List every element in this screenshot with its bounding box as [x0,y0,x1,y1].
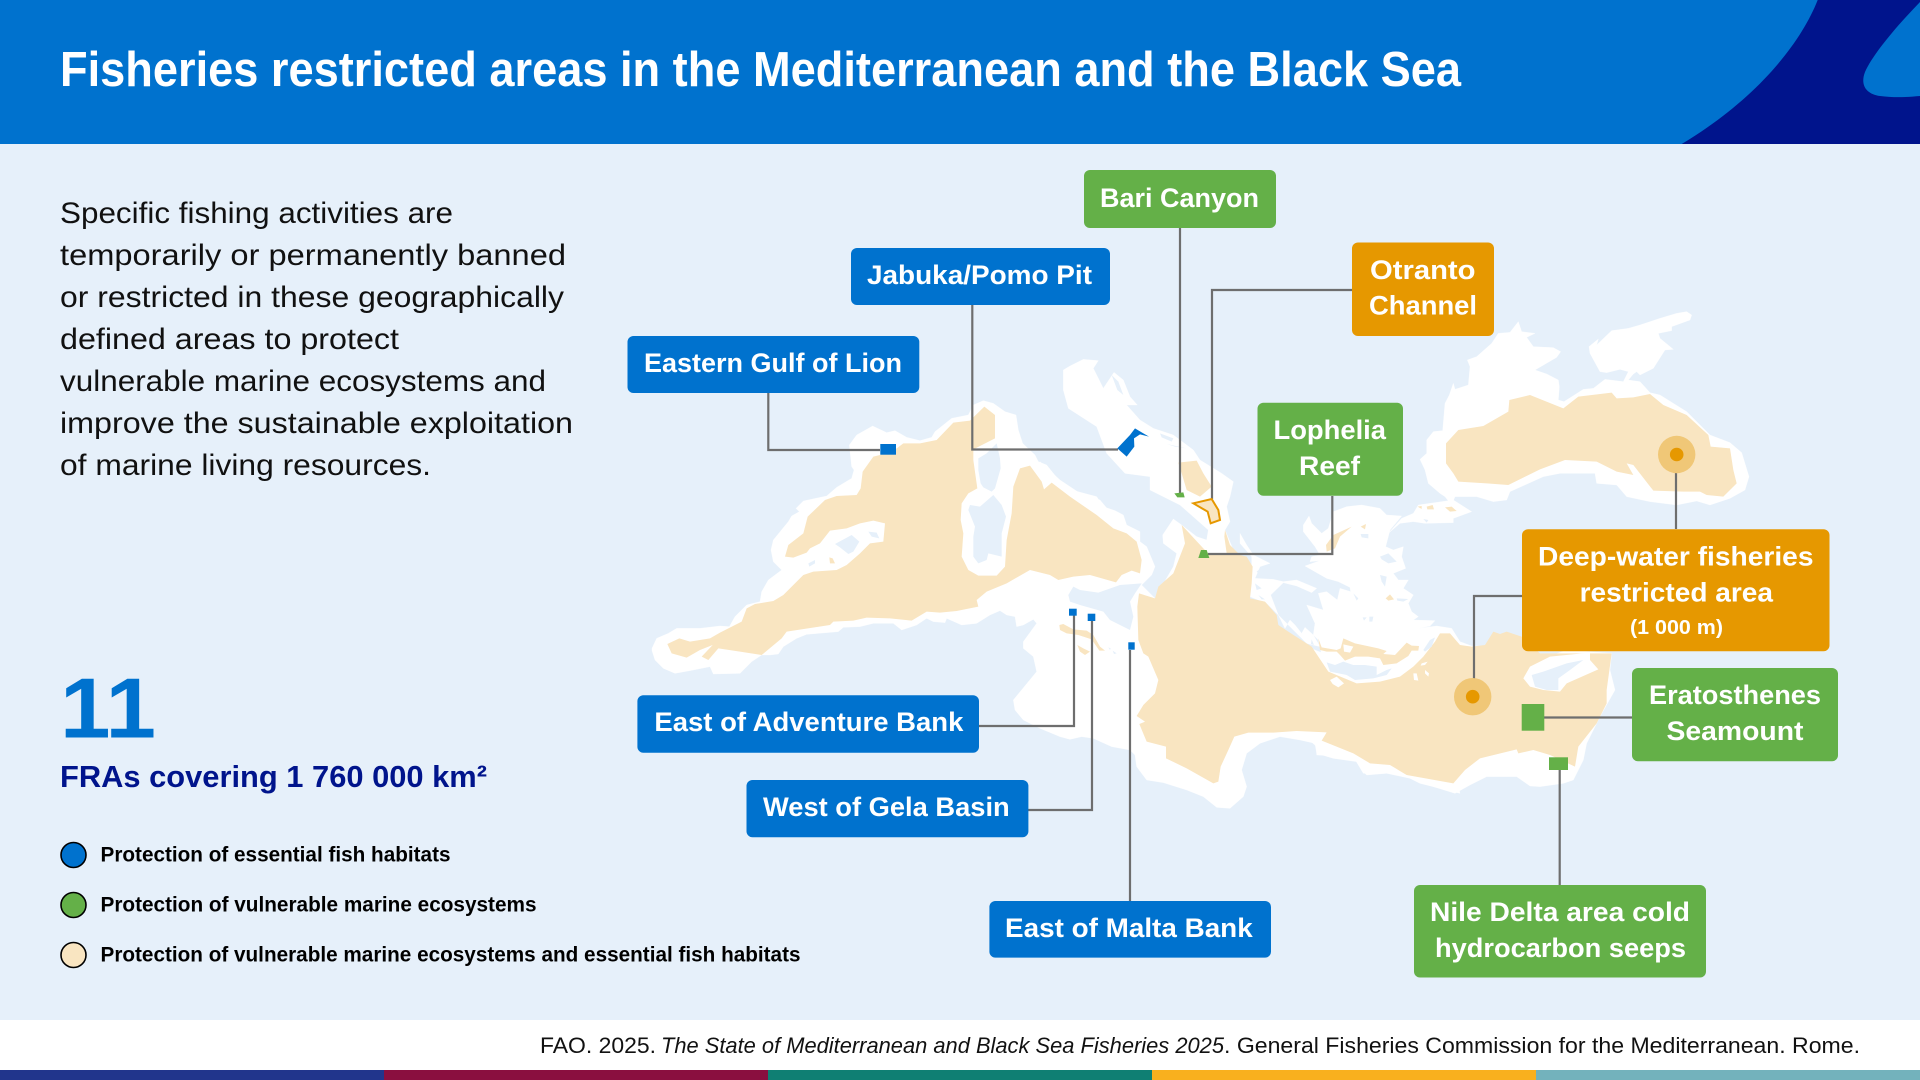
callout: Nile Delta area cold hydrocarbon seeps [1414,885,1706,978]
callout: Nile Delta area cold hydrocarbon seeps: hydrocarbon seeps [1435,933,1686,963]
map: Mediterranean and Black Sea [652,312,1749,808]
source citation [540,1033,1860,1058]
small restricted patches [829,461,1457,665]
callout: Lophelia Reef: Reef [1299,451,1361,481]
callout: East of Malta Bank [989,901,1271,958]
intro text block: Specific fishing activities are [60,197,453,230]
callout: Lophelia Reef [1258,403,1403,496]
callout: Eratosthenes Seamount [1632,668,1838,761]
footer band [0,1020,1920,1070]
callout: Eastern Gulf of Lion [628,336,919,393]
legend item: both: Protection of vulnerable marine ecosystems and essential fish habitats [100,944,800,967]
fisheries restricted area: Black Sea [1446,393,1737,497]
sea shelf areas [652,312,1749,808]
callout: Deep-water fisheries restricted area [1522,529,1830,651]
callout: Jabuka/Pomo Pit [851,248,1110,305]
legend item: vulnerable marine ecosystems: Protection of vulnerable marine ecosystems [100,894,536,917]
marker: Bari Canyon [1174,492,1185,497]
intro text block: of marine living resources. [60,449,431,482]
intro text block: improve the sustainable exploitation [60,407,573,440]
callout: East of Malta Bank: East of Malta Bank [1005,913,1254,943]
fisheries restricted area: eastern Mediterranean [1137,525,1612,783]
marker: deep-water area, Mediterranean [1454,678,1491,715]
islands and land cut-outs [808,375,1583,690]
colour strip [0,1070,1920,1080]
callout: Lophelia Reef: Lophelia [1274,415,1387,445]
legend item: essential fish habitats: Protection of essential fish habitats [100,844,450,867]
callout: East of Adventure Bank [637,695,979,753]
callout: Otranto Channel [1352,242,1494,336]
callout: Nile Delta area cold hydrocarbon seeps: Nile Delta area cold [1430,897,1690,927]
title: Fisheries restricted areas in the Mediterranean and the Black Sea [60,43,1462,97]
callout: Bari Canyon [1084,170,1276,228]
marker: East of Adventure Bank [1069,609,1077,616]
callout: Deep-water fisheries restricted area: (1 000 m) [1630,617,1723,639]
callout: Eratosthenes Seamount: Eratosthenes [1649,680,1821,710]
big number: 11: 11 [60,662,156,756]
header banner [0,0,1920,144]
map markers [880,428,1695,770]
callout: Bari Canyon: Bari Canyon [1100,183,1259,213]
fisheries restricted area: western Mediterranean [667,407,1142,660]
marker: West of Gela Basin [1088,614,1095,621]
intro text block: or restricted in these geographically [60,281,564,314]
marker: Nile Delta seeps [1549,757,1568,770]
callout: Deep-water fisheries restricted area: restricted area [1580,578,1774,608]
intro text block: defined areas to protect [60,323,400,356]
callout: Eastern Gulf of Lion: Eastern Gulf of Lion [644,348,902,378]
FRA coverage statement: FRAs covering 1 760 000 km² [60,759,487,794]
callout: Otranto Channel: Channel [1369,290,1477,320]
callout: Deep-water fisheries restricted area: Deep-water fisheries [1538,542,1814,572]
source citation: The State of Mediterranean and Black Sea Fisheries 2025 [661,1033,1225,1058]
callout: West of Gela Basin [746,780,1028,837]
marker: Eratosthenes Seamount [1522,704,1544,731]
legend [61,842,800,968]
callout: West of Gela Basin: West of Gela Basin [763,792,1010,822]
intro text block: temporarily or permanently banned [60,239,566,272]
source citation: . General Fisheries Commission for the Mediterranean. Rome. [1224,1033,1860,1058]
marker: Otranto Channel [1193,499,1220,523]
callout: Eratosthenes Seamount: Seamount [1666,716,1804,746]
marker: East of Malta Bank [1128,642,1135,650]
intro text block: vulnerable marine ecosystems and [60,365,546,398]
intro text block [60,197,573,482]
callout: Otranto Channel: Otranto [1370,255,1476,285]
marker: deep-water area, Black Sea [1658,436,1695,473]
callout: East of Adventure Bank: East of Adventure Bank [654,707,964,737]
callout: Jabuka/Pomo Pit: Jabuka/Pomo Pit [867,260,1092,290]
marker: Eastern Gulf of Lion [880,444,896,455]
source citation: FAO. 2025. [540,1033,656,1058]
leader lines [768,228,1676,901]
white islets and Cyprus shelf on the restricted area [1330,644,1598,692]
marker: Lophelia Reef [1198,550,1209,558]
marker: Jabuka/Pomo Pit [1117,428,1149,457]
